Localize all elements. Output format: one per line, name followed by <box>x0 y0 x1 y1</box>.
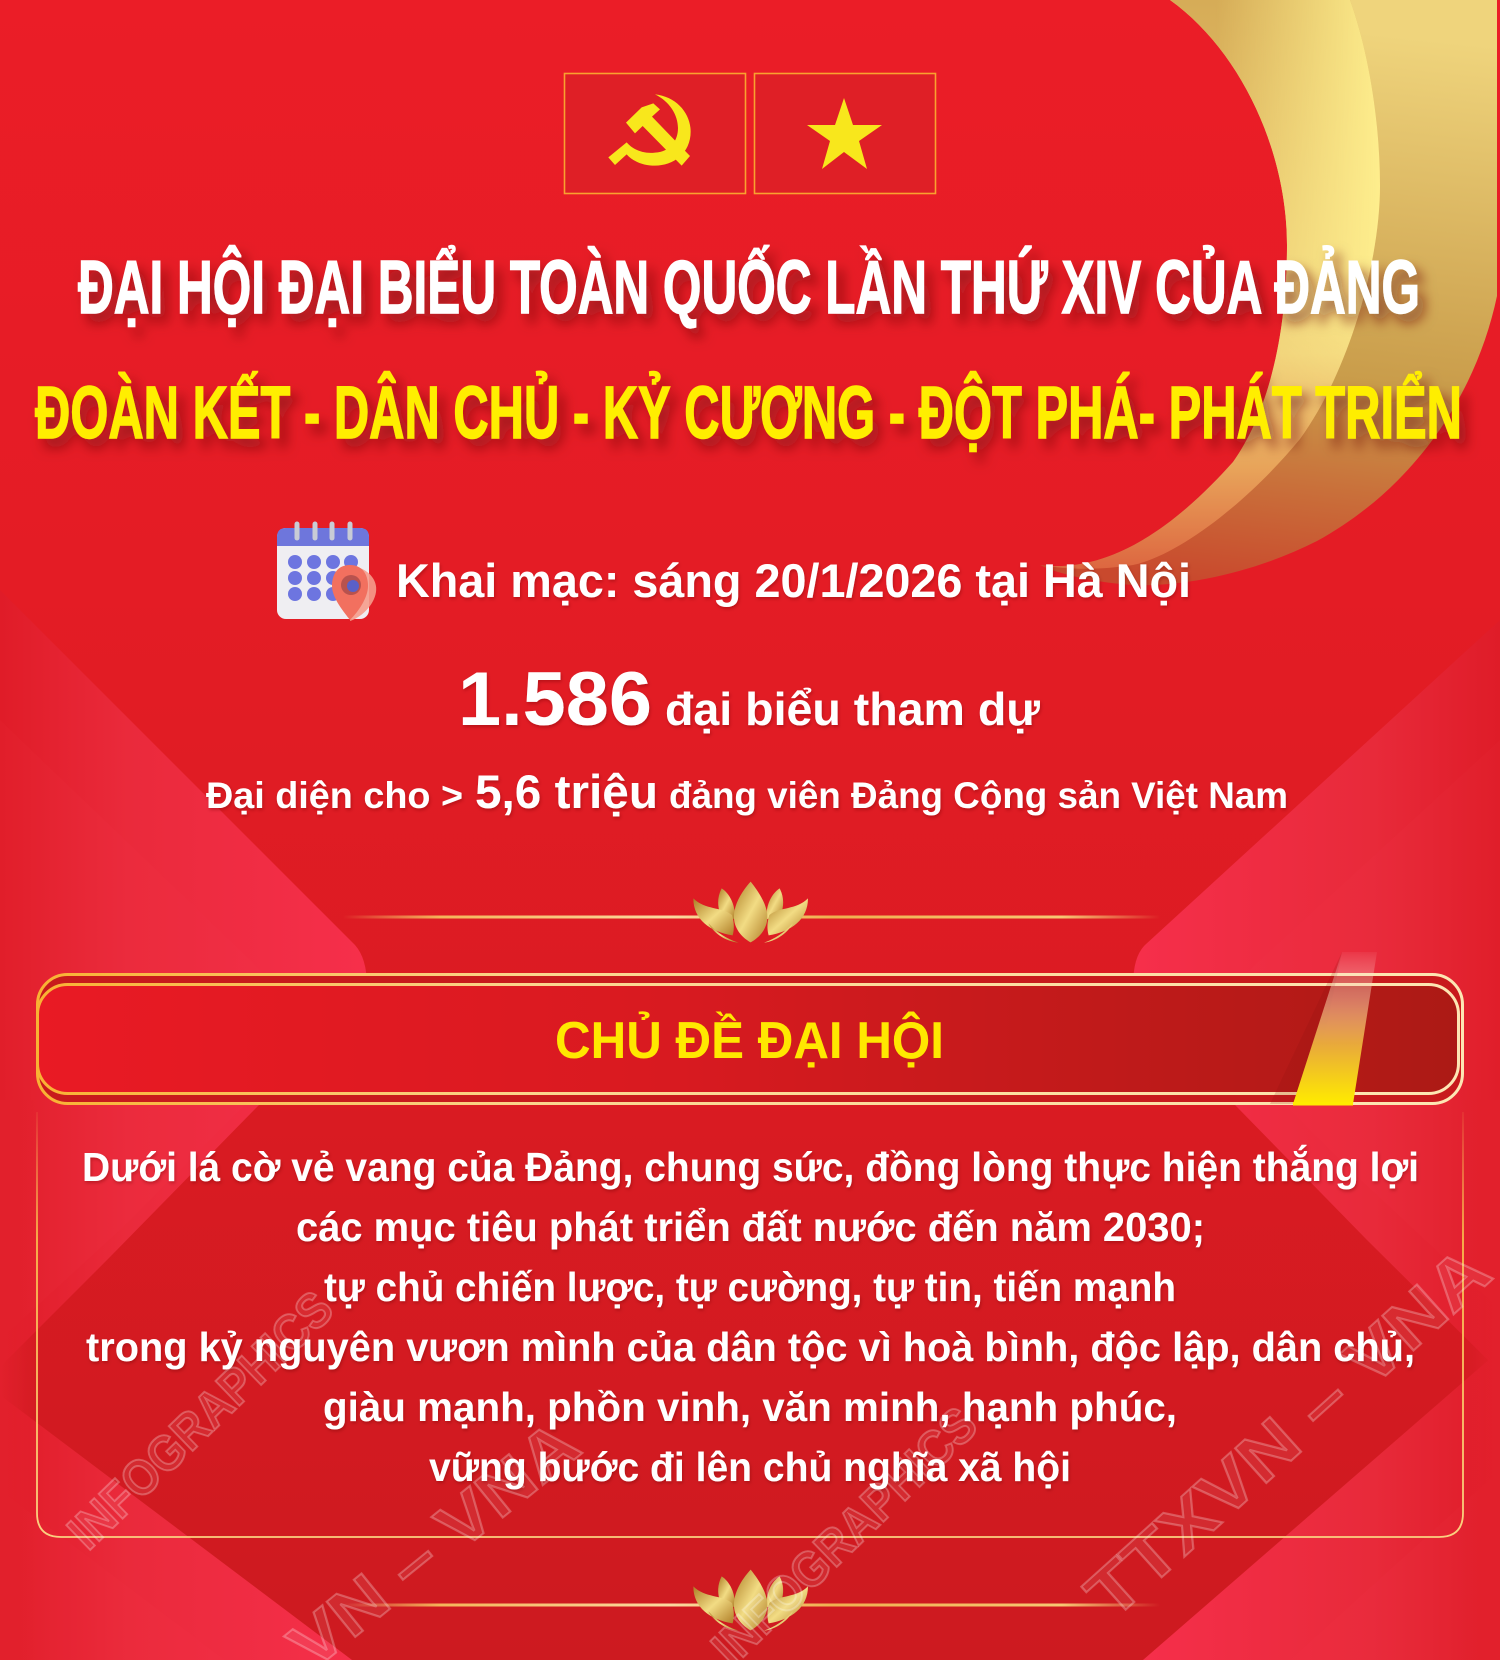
icon: party flag <box>564 74 746 194</box>
theme text: trong kỷ nguyên vươn mình của dân tộc vì hoà bình, độc lập, dân chủ, <box>86 1324 1415 1370</box>
divider with lotus (bottom) <box>343 1570 1160 1631</box>
theme text <box>82 1144 1419 1490</box>
panel: theme banner <box>38 952 1462 1106</box>
background: right diagonal panels <box>1133 620 1500 1660</box>
panel: theme text frame <box>37 1112 1463 1537</box>
theme text: giàu mạnh, phồn vinh, văn minh, hạnh phúc, <box>323 1384 1177 1430</box>
watermark: INFOGRAPHICS <box>57 1280 344 1560</box>
delegates count: đại biểu tham dự <box>665 683 1041 735</box>
theme text: Dưới lá cờ vẻ vang của Đảng, chung sức, đồng lòng thực hiện thắng lợi <box>82 1144 1419 1190</box>
watermark: TTXVN – VNA <box>1071 1232 1500 1633</box>
icon: national flag <box>754 74 936 194</box>
divider with lotus <box>343 882 1160 943</box>
theme text: vững bước đi lên chủ nghĩa xã hội <box>429 1444 1071 1490</box>
party members line: Đại diện cho > <box>206 775 463 816</box>
watermark <box>57 1232 1500 1660</box>
theme text: các mục tiêu phát triển đất nước đến năm 2030; <box>296 1204 1205 1250</box>
party members line <box>206 765 1288 818</box>
banner heading: CHỦ ĐỀ ĐẠI HỘI <box>555 1011 944 1070</box>
party members line: đảng viên Đảng Cộng sản Việt Nam <box>669 775 1288 816</box>
icon: calendar with location pin <box>277 524 376 621</box>
gold swoosh <box>1040 0 1497 585</box>
delegates count: 1.586 <box>458 657 652 742</box>
party members line: 5,6 triệu <box>475 765 658 818</box>
theme text: tự chủ chiến lược, tự cường, tự tin, tiến mạnh <box>324 1264 1176 1310</box>
background: left diagonal panels <box>0 590 367 1660</box>
background: soft side edges <box>0 1100 1500 1660</box>
delegates count <box>458 657 1041 742</box>
opening line: Khai mạc: sáng 20/1/2026 tại Hà Nội <box>396 554 1191 607</box>
